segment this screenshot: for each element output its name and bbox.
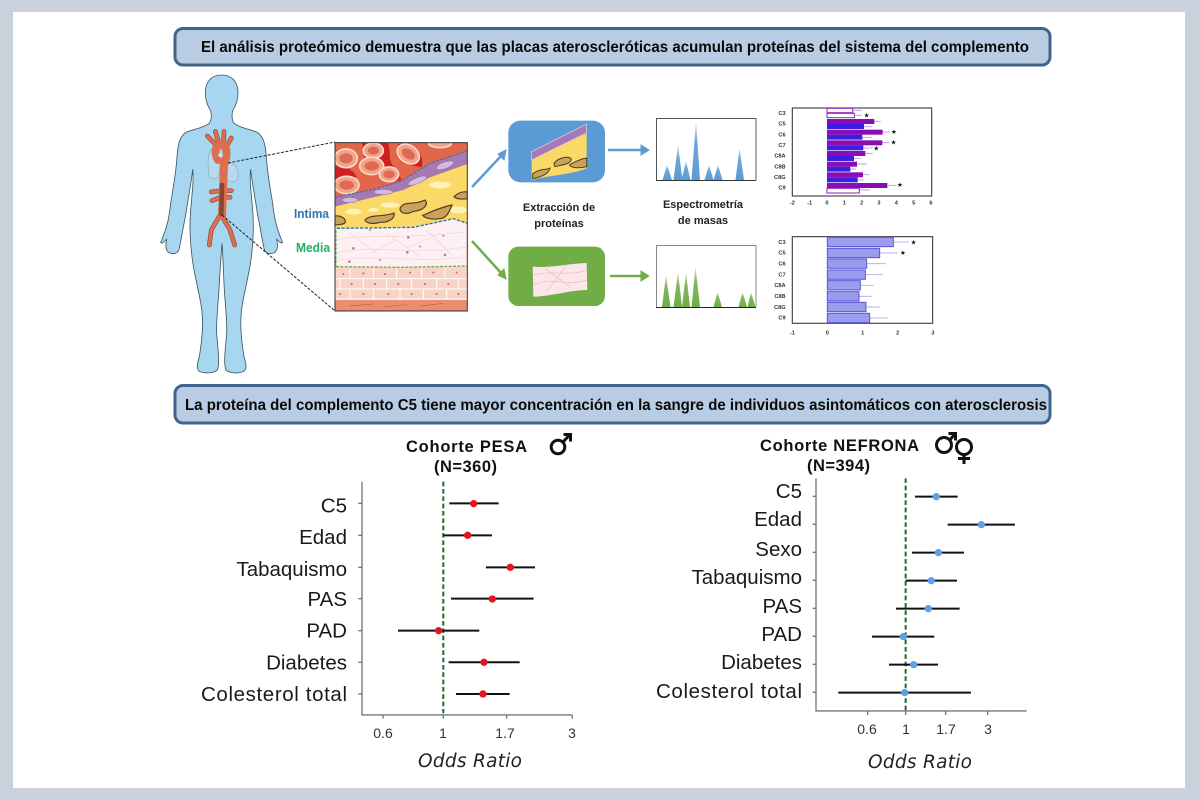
point estimates [900,493,985,696]
category labels: C7 [778,143,786,149]
axis labels: 1.7 [936,721,956,737]
value axis labels: 4 [895,201,899,207]
row labels: PAS [308,588,347,611]
row labels: Diabetes [721,651,802,674]
value axis labels: 0 [826,330,829,336]
heading: C5 concentration: La proteína del complemento C5 tiene mayor concentración en la sangre de individuos asintomáticos con aterosclerosis [185,397,1047,414]
forest plot: PESA cohort [201,434,576,772]
value axis labels: 5 [912,201,915,207]
axes [358,482,572,719]
point estimates [435,500,514,698]
value axis labels: 1 [861,330,864,336]
category labels [774,111,786,192]
reference line at 1 [440,482,446,713]
category labels: C8B [774,164,786,170]
arrow: blue to extraction [472,150,506,187]
intima bars [827,108,887,193]
value axis labels: 2 [860,201,863,207]
category labels: C3 [778,240,786,246]
purple endothelium [335,151,467,207]
axis labels: 1 [902,721,910,737]
forest plot: NEFRONA cohort [656,434,1027,773]
error bars [850,110,896,190]
card: intima extraction [508,121,605,182]
value axis labels [790,201,933,207]
lungs and heart outline [208,148,238,182]
axis labels: 0.6 [373,725,393,741]
media bars [827,237,893,323]
value axis labels: -1 [790,330,795,336]
significance stars: ★ [897,181,903,189]
heading: proteomic analysis [175,28,1050,65]
error bars [859,242,909,318]
category labels: C6 [778,262,786,268]
axis title: Odds Ratio [868,752,972,773]
plot title: Cohorte PESA [406,438,527,456]
row labels: C5 [321,494,347,518]
axis labels: 3 [568,725,576,741]
category labels: C8G [774,305,786,311]
row labels: Colesterol total [656,680,802,703]
label: Media: Media [296,240,331,255]
heading: proteomic analysis: El análisis proteómico demuestra que las placas ateroscleróticas acumulan proteínas del sistema del complemento [201,39,1029,56]
arrow: green to spectrum [610,271,649,281]
value axis labels: 0 [825,201,829,207]
caption: protein extraction: proteínas [534,218,584,230]
icon: male and female symbols [936,434,972,464]
illustration: human body with aorta [161,75,283,373]
plot title: (N=360) [434,458,497,476]
category labels: C6 [778,132,786,138]
axis title: Odds Ratio [418,751,522,772]
value axis labels: 6 [929,201,933,207]
row labels: Colesterol total [201,683,347,706]
axis labels: 0.6 [857,721,877,737]
caption: protein extraction: Extracción de [523,202,595,214]
row labels: PAD [761,623,802,646]
category labels: C8B [774,294,786,300]
row labels: Tabaquismo [691,566,802,589]
intima boundary [335,151,467,197]
row labels: C5 [776,480,802,503]
plot title [760,437,919,475]
significance stars: ★ [900,249,906,257]
chart: media mass spectrum [656,246,756,308]
category labels: C3 [778,111,786,117]
confidence intervals [838,497,1015,693]
row labels: PAD [306,620,347,642]
heading: C5 concentration [175,386,1050,423]
media layer smooth muscle [335,218,467,267]
significance stars: ★ [911,239,917,247]
row labels: Diabetes [266,652,347,674]
row labels [656,480,802,703]
significance stars: ★ [891,139,897,147]
adventitia layer [335,267,467,301]
category labels: C7 [778,272,786,278]
confidence intervals [398,503,535,694]
axis labels: 1 [439,725,447,741]
significance stars: ★ [873,144,879,152]
row labels [201,494,347,706]
label: Intima: Intima [294,206,330,221]
category labels: C5 [778,122,786,128]
category labels: C8A [774,154,786,160]
value axis labels: -2 [790,201,795,207]
row labels: Edad [299,526,347,549]
foam cells [335,192,467,225]
bar chart: intima complement proteins [774,108,933,207]
category labels: C9 [778,316,786,322]
arrow: blue to spectrum [608,145,649,155]
reference line at 1 [903,478,909,711]
category labels: C8A [774,283,786,289]
lumen with red blood cells [335,143,467,199]
intima tissue sample [532,133,587,180]
value axis labels: -1 [807,201,812,207]
value axis labels: 3 [931,330,935,336]
value axis labels: 2 [896,330,899,336]
caption: mass spectrometry [663,199,744,227]
category labels: C9 [778,186,786,192]
row labels: PAS [762,595,802,618]
icon: male symbol [551,434,570,454]
axis labels: 3 [984,721,992,737]
caption: mass spectrometry: de masas [678,215,728,227]
bar chart: media complement proteins [774,237,935,336]
axis labels [857,721,992,737]
body silhouette [161,75,283,373]
plot title: Cohorte NEFRONA [760,437,919,455]
axis labels: 1.7 [495,725,515,741]
significance stars [864,112,903,189]
axes [813,478,1027,715]
value axis labels: 1 [843,201,846,207]
category labels [774,240,786,322]
media tissue sample [533,263,587,297]
value axis labels [790,330,935,336]
row labels: Sexo [755,538,802,561]
illustration: arterial wall layers [334,139,467,311]
caption: mass spectrometry: Espectrometría [663,199,744,211]
chart: intima mass spectrum [656,118,756,180]
row labels: Tabaquismo [236,558,347,581]
plot title: (N=394) [807,457,870,475]
row labels: Edad [754,508,802,531]
yellow lipid layer [335,162,467,228]
caption: protein extraction [523,202,595,230]
card: media extraction [508,247,605,306]
aorta and arteries [207,131,235,245]
axis labels [373,725,576,741]
value axis labels: 3 [877,201,881,207]
significance stars: ★ [891,128,897,136]
significance stars [900,239,917,257]
media boundary [336,266,467,267]
category labels: C8G [774,175,786,181]
plot title [406,438,527,476]
arrow: green to extraction [472,241,506,279]
significance stars: ★ [864,112,870,120]
category labels: C5 [778,251,786,257]
zoom connector lines [222,142,335,311]
